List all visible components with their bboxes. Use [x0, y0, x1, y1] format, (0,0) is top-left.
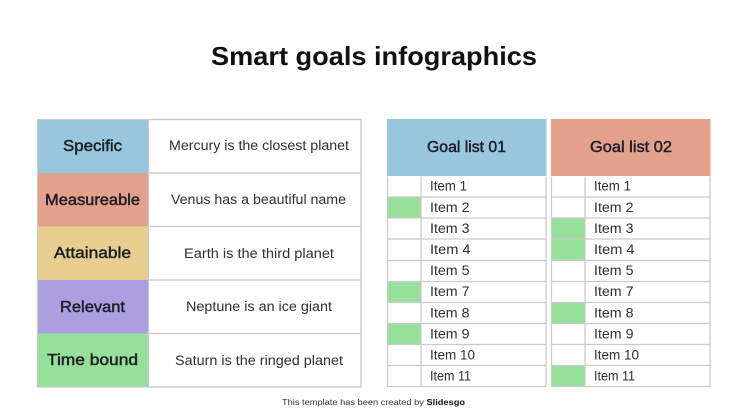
item labels: list 01: Item 8 — [430, 306, 470, 320]
row: Specific — [38, 120, 361, 173]
row: Attainable: Attainable — [54, 245, 131, 262]
item labels: list 01: Item 11 — [430, 368, 471, 384]
header: goal list 02 — [551, 119, 710, 176]
item labels: list 02: Item 9 — [594, 326, 634, 342]
row: Specific: Mercury is the closest planet — [169, 138, 349, 153]
panel: goal list 02 — [551, 119, 710, 386]
row: Measureable — [38, 173, 361, 226]
item labels: list 02: Item 4 — [594, 242, 635, 257]
header: goal list 01 — [387, 119, 546, 176]
item labels: list 01: Item 3 — [430, 221, 470, 236]
item labels: list 01: Item 7 — [430, 284, 470, 299]
item labels: list 01: Item 2 — [430, 200, 470, 215]
checked cells: list 01 — [388, 197, 421, 344]
panel: SMART criteria table — [38, 120, 361, 387]
row: Attainable — [38, 226, 361, 280]
item labels: list 02: Item 3 — [594, 221, 634, 236]
row: Relevant: Relevant — [60, 299, 126, 316]
row: Relevant — [38, 280, 361, 334]
row: Time bound: Time bound — [47, 352, 138, 369]
row: Relevant: Neptune is an ice giant — [186, 299, 332, 314]
header: goal list 01: Goal list 01 — [427, 139, 506, 156]
item labels: list 01: Item 4 — [430, 242, 471, 257]
item labels: list 02: Item 2 — [594, 200, 634, 215]
footer credit: This template has been created by Slidesgo — [282, 398, 465, 407]
row: Attainable: Earth is the third planet — [184, 246, 334, 261]
item labels: list 01: Item 1 — [430, 178, 467, 194]
row: Measureable: Measureable — [45, 192, 140, 209]
row: Time bound — [38, 334, 361, 387]
row: Time bound: Saturn is the ringed planet — [175, 353, 343, 368]
item labels: list 02: Item 10 — [594, 348, 639, 362]
item labels: list 01: Item 5 — [430, 263, 470, 278]
item labels: list 02: Item 8 — [594, 306, 634, 320]
item labels: list 01: Item 9 — [430, 326, 470, 342]
item labels: list 01 — [430, 178, 475, 384]
item labels: list 02: Item 11 — [594, 368, 635, 384]
panel: goal list 01 — [387, 119, 546, 386]
header: goal list 02: Goal list 02 — [590, 139, 672, 156]
item labels: list 02 — [594, 178, 639, 384]
row: Specific: Specific — [63, 138, 122, 155]
checked cells: list 02 — [552, 218, 585, 386]
item labels: list 02: Item 5 — [594, 263, 634, 278]
item labels: list 02: Item 7 — [594, 284, 634, 299]
item labels: list 02: Item 1 — [594, 178, 631, 194]
row: Measureable: Venus has a beautiful name — [171, 192, 346, 207]
item labels: list 01: Item 10 — [430, 348, 475, 362]
title: Smart goals infographics — [211, 41, 537, 71]
